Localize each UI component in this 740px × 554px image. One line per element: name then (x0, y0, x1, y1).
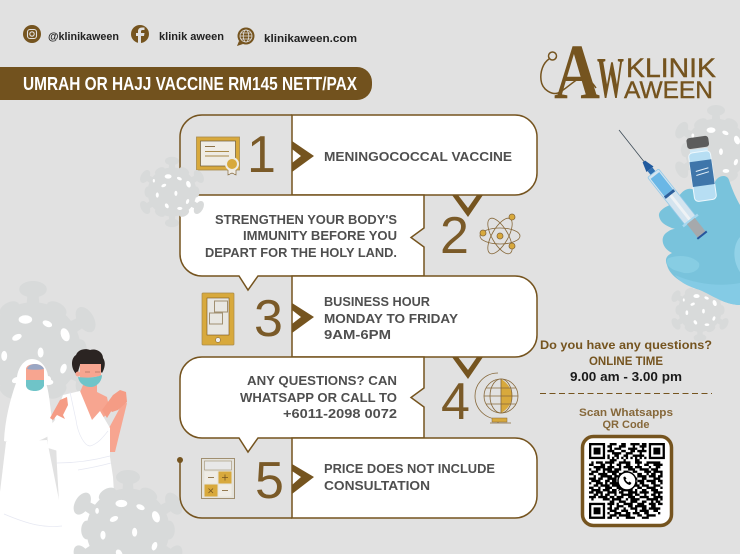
text: step 5: CONSULTATION (324, 478, 430, 493)
text: step 3: MONDAY TO FRIDAY (324, 311, 458, 326)
icon: globe (475, 373, 518, 423)
icon: calculator (202, 458, 234, 498)
icon: facebook (131, 25, 149, 43)
text: step 5: PRICE DOES NOT INCLUDE (324, 461, 495, 476)
text: step 4 (240, 373, 397, 421)
people: pilgrims praying (0, 349, 127, 554)
arrow: step 5 chevron (292, 464, 314, 494)
text: step 3: BUSINESS HOUR (324, 294, 431, 309)
title banner: UMRAH OR HAJJ VACCINE RM145 NETT/PAX (23, 74, 357, 94)
glove (659, 176, 740, 305)
text: step 4: +6011-2098 0072 (283, 406, 397, 421)
logo: Klinik Aween: W (597, 45, 624, 110)
text: hours: 9.00 am - 3.00 pm (570, 370, 682, 384)
text: website: klinikaween.com (264, 33, 357, 45)
text: question: Do you have any questions? (540, 338, 712, 352)
virus: large left (0, 281, 100, 419)
virus: top right (673, 105, 740, 195)
text: step 2: IMMUNITY BEFORE YOU (243, 228, 397, 243)
logo: Klinik Aween (541, 28, 716, 115)
QR modules (589, 444, 664, 518)
man figure (55, 349, 127, 554)
number 3: 3 (254, 290, 283, 348)
arrow: step 3 chevron (292, 303, 314, 333)
text: scan prompt (579, 407, 673, 431)
contact info (540, 338, 712, 431)
text: scan prompt: Scan Whatsapps (579, 407, 673, 419)
title banner (0, 67, 372, 100)
text: step 2: STRENGTHEN YOUR BODY'S (215, 212, 397, 227)
icon: instagram (23, 25, 41, 43)
number 4: 4 (441, 373, 470, 431)
arrow: step 1 chevron (292, 141, 314, 172)
panel: step 5 (177, 438, 537, 518)
step 1 white bubble (292, 115, 537, 195)
panel: step 2 (180, 195, 520, 290)
arrow: step 1 to 2 pointer (452, 195, 483, 217)
syringe (612, 124, 710, 242)
panel: step 1 (180, 115, 537, 195)
social links (23, 25, 357, 46)
panel: step 4 (180, 357, 518, 452)
step 5 white bubble (292, 438, 537, 518)
text: instagram handle: @klinikaween (48, 31, 119, 43)
icon: certificate (196, 137, 240, 175)
text: step 2: DEPART FOR THE HOLY LAND. (205, 245, 397, 260)
text: online time: ONLINE TIME (589, 354, 663, 368)
logo wordmark: AWEEN (624, 77, 713, 104)
text: step 2 (205, 212, 397, 260)
logo monogram: A (554, 28, 600, 115)
icon: atom (480, 214, 520, 257)
step 4 white bubble (180, 357, 424, 452)
logo stethoscope (541, 52, 596, 93)
text: step 4: WHATSAPP OR CALL TO (240, 390, 397, 405)
QR code (582, 436, 672, 526)
number 5: 5 (255, 452, 284, 510)
virus: centre left (138, 157, 206, 227)
text: step 4: ANY QUESTIONS? CAN (247, 373, 397, 388)
logo wordmark (624, 53, 716, 104)
text: step 1: MENINGOCOCCAL VACCINE (324, 149, 512, 164)
text: step 5 (324, 461, 495, 493)
logo wordmark: KLINIK (626, 53, 716, 83)
arrow: step 3 to 4 pointer (452, 357, 483, 379)
text: facebook name: klinik aween (159, 31, 224, 43)
number 1: 1 (247, 126, 276, 184)
panel: step 3 (202, 276, 537, 357)
text: step 3: 9AM-6PM (324, 327, 391, 342)
virus: lower right (670, 278, 730, 342)
number 2: 2 (440, 207, 469, 265)
woman figure (0, 359, 68, 554)
step 2 white bubble (180, 195, 424, 290)
vaccine vial (686, 135, 717, 202)
text: step 3 (324, 294, 458, 342)
syringe and glove (612, 124, 740, 305)
step 3 white bubble (292, 276, 537, 357)
icon: website globe (237, 28, 254, 46)
icon: whatsapp (618, 472, 636, 491)
icon: tablet (202, 293, 234, 345)
text: scan prompt: QR Code (602, 419, 650, 431)
virus: bottom (70, 470, 186, 554)
